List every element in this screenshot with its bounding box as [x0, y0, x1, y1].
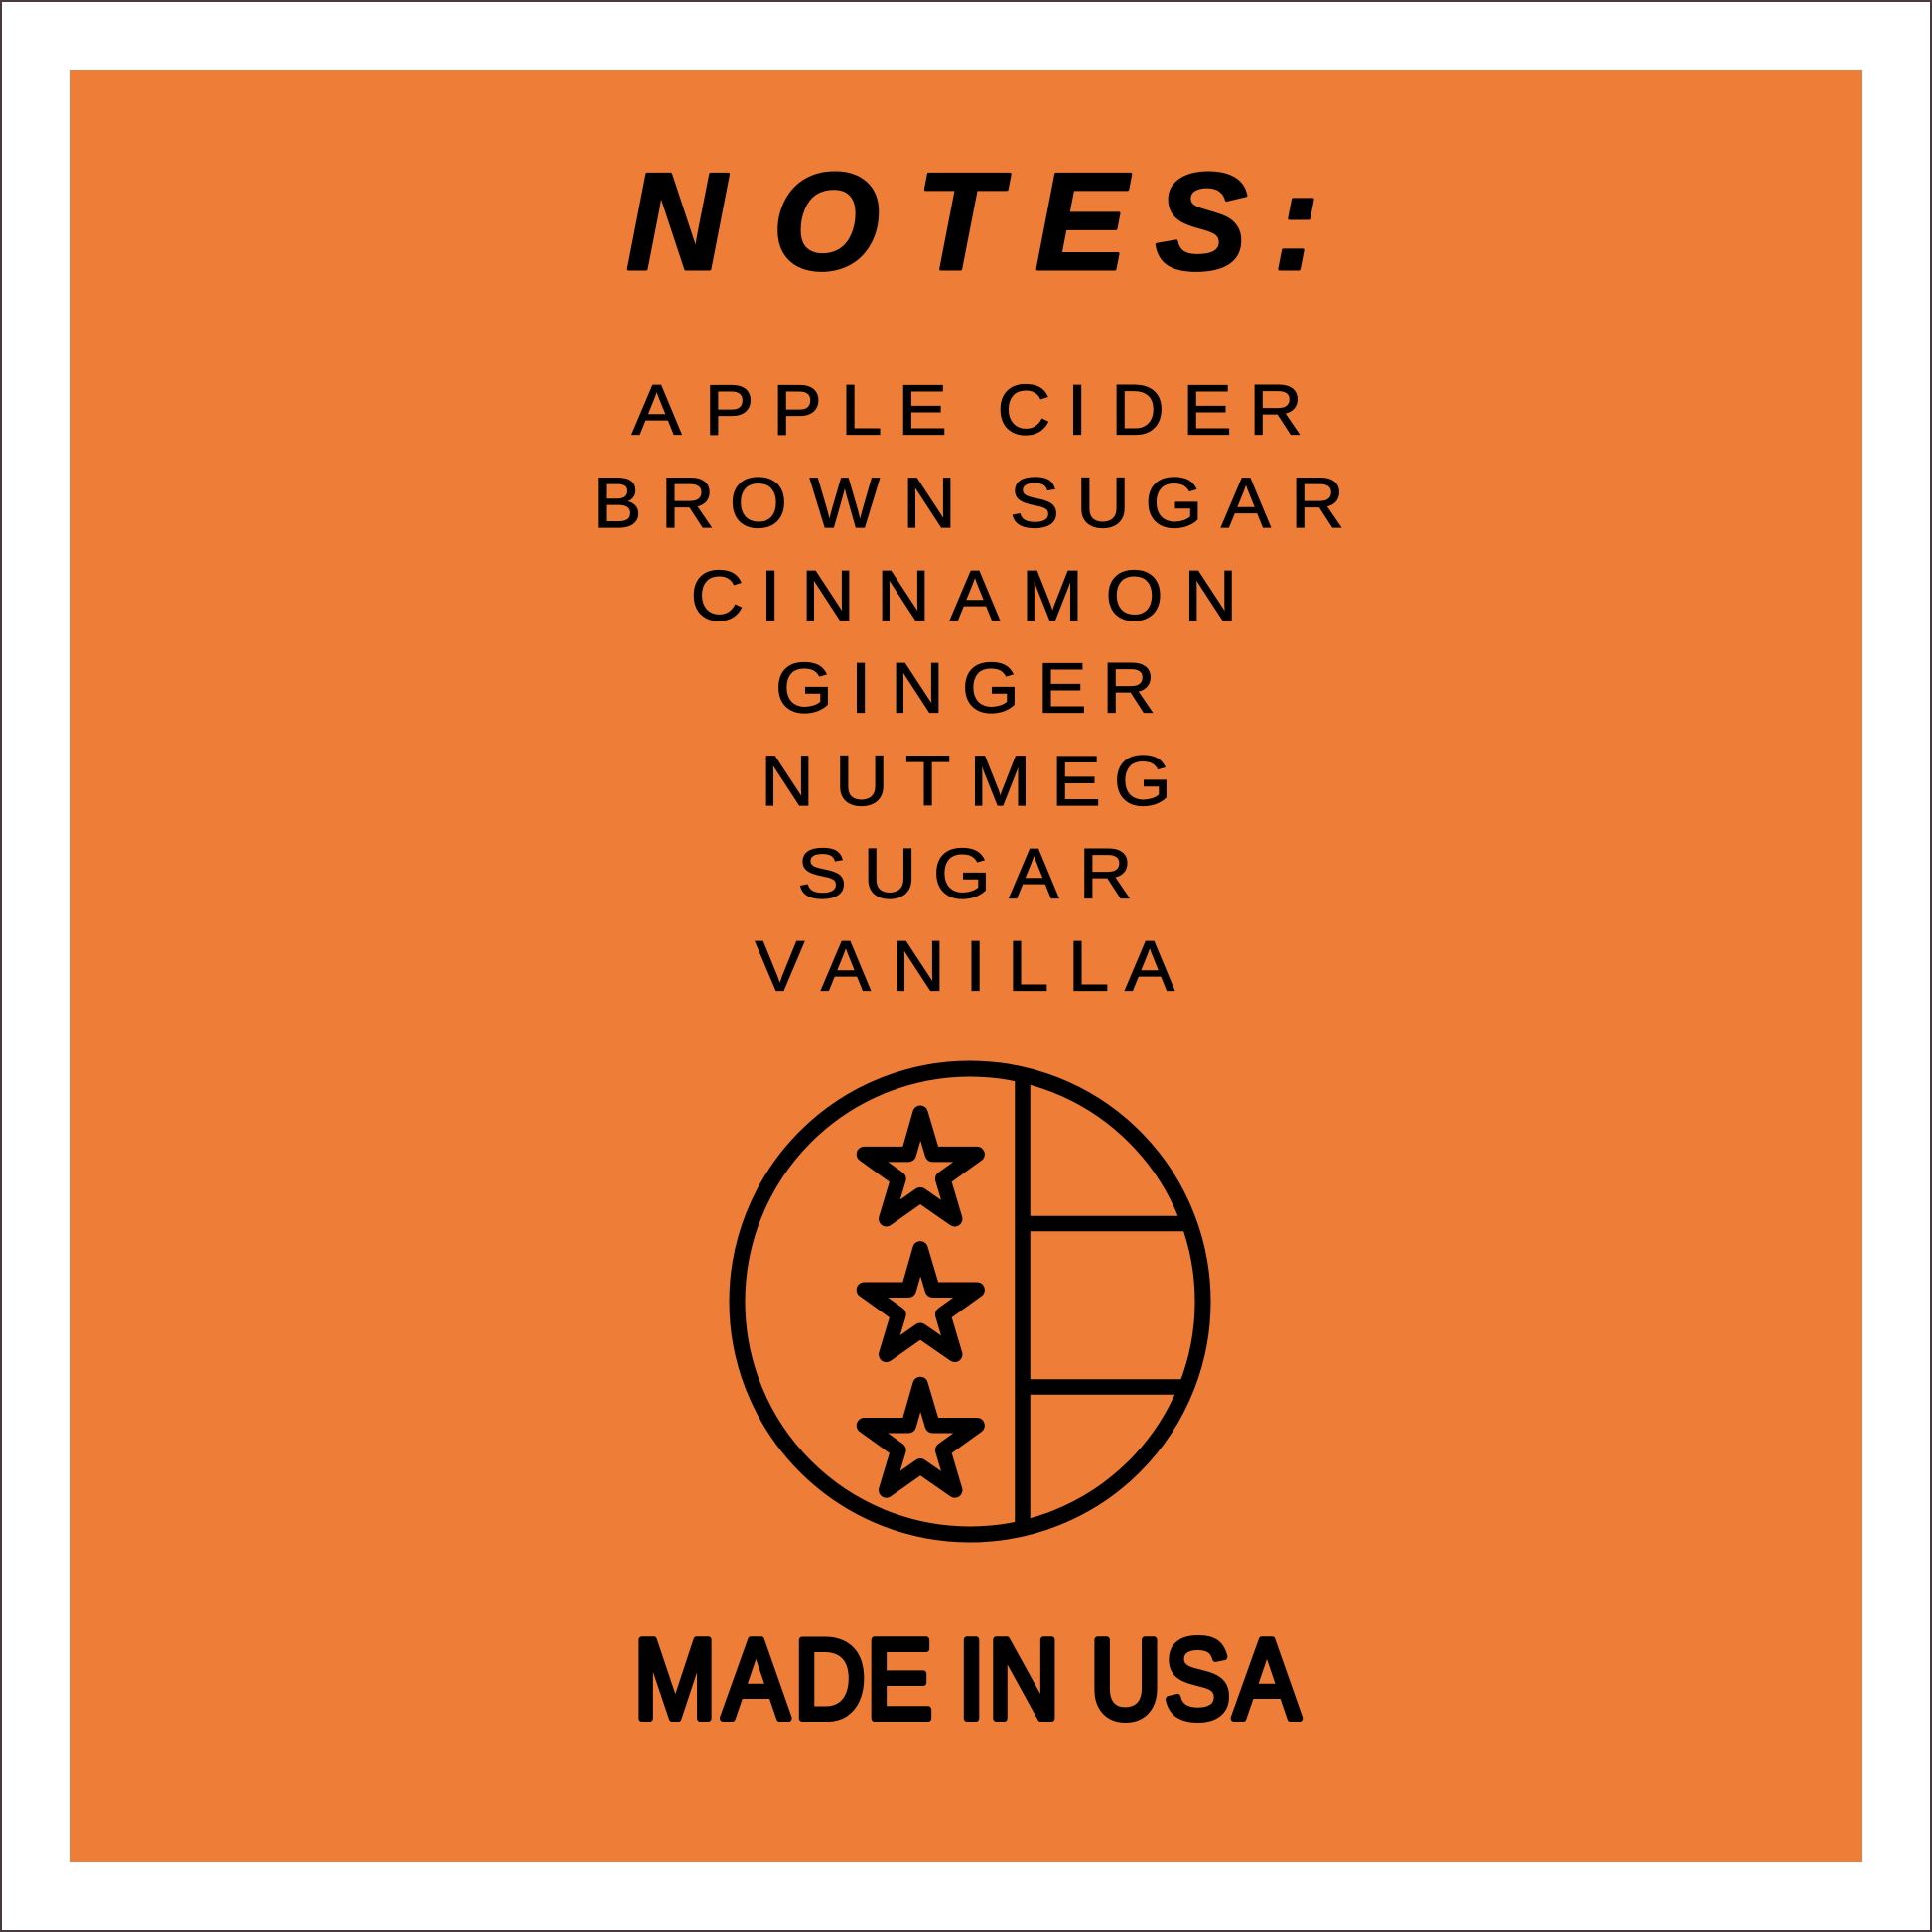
star 1 — [864, 1113, 977, 1219]
list of notes — [593, 371, 1344, 1006]
note: nutmeg: NUTMEG — [760, 742, 1172, 821]
note: vanilla: VANILLA — [756, 927, 1174, 1006]
star 2 — [864, 1249, 977, 1354]
note: cinnamon: CINNAMON — [691, 557, 1237, 635]
badge circle — [737, 1068, 1203, 1535]
note: ginger: GINGER — [775, 649, 1156, 728]
note: apple cider: APPLE CIDER — [632, 371, 1303, 450]
note: sugar: SUGAR — [797, 835, 1132, 913]
note: brown sugar: BROWN SUGAR — [593, 464, 1344, 543]
icon: round USA flag badge — [737, 1068, 1203, 1535]
stars — [864, 1113, 977, 1490]
flag pole divider and stripes — [1023, 1075, 1189, 1528]
title: NOTES: — [626, 145, 1319, 299]
star 3 — [864, 1384, 977, 1490]
made in usa label: MADE IN USA — [633, 1616, 1301, 1742]
